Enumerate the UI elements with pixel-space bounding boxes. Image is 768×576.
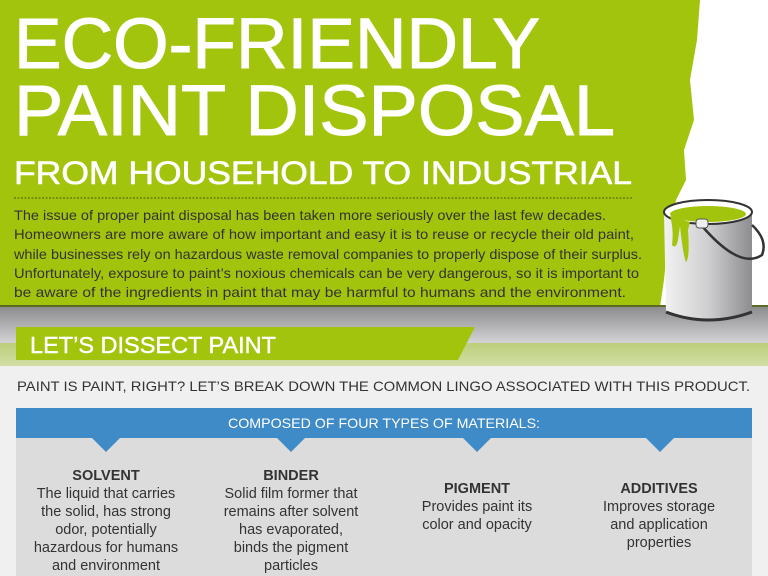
binder: BINDER [263,468,319,484]
pigment [422,481,533,533]
title: ECO-FRIENDLY [14,5,540,84]
pigment: color and opacity [422,517,533,533]
binder [224,468,358,574]
panel: materials [16,408,752,576]
solvent: odor, potentially [55,522,158,538]
solvent: and environment [52,558,160,574]
pigment: PIGMENT [444,481,510,497]
title: FROM HOUSEHOLD TO INDUSTRIAL [14,155,632,191]
icon: paint bucket [664,200,764,320]
intro paragraph: The issue of proper paint disposal has been taken more seriously over the last few decades. [14,207,606,223]
pigment: Provides paint its [422,499,532,515]
intro paragraph: Homeowners are more aware of how important and easy it is to reuse or recycle their old paint, [14,226,634,242]
intro paragraph: be aware of the ingredients in paint that may be harmful to humans and the environment. [14,284,626,300]
intro paragraph: while businesses rely on hazardous waste removal companies to properly dispose of their surplus. [13,246,642,262]
intro paragraph: Unfortunately, exposure to paint’s noxious chemicals can be very dangerous, so it is important to [14,265,639,281]
subheading: PAINT IS PAINT, RIGHT? LET’S BREAK DOWN THE COMMON LINGO ASSOCIATED WITH THIS PRODUCT. [17,378,750,394]
title [14,5,632,191]
solvent: the solid, has strong [41,504,171,520]
additives [603,481,715,551]
binder: has evaporated, [239,522,343,538]
light green band [0,343,768,366]
binder: binds the pigment [234,540,348,556]
section header: let's dissect paint [16,327,475,360]
solvent: SOLVENT [72,468,140,484]
solvent: hazardous for humans [34,540,178,556]
blue bar: COMPOSED OF FOUR TYPES OF MATERIALS: [228,415,540,431]
blue bar [16,408,752,452]
gray band [0,307,768,343]
additives: and application [610,517,708,533]
section header: let's dissect paint: LET’S DISSECT PAINT [30,332,276,358]
solvent [34,468,178,574]
title: PAINT DISPOSAL [14,72,615,151]
binder: particles [264,558,318,574]
additives: ADDITIVES [620,481,698,497]
binder: remains after solvent [224,504,358,520]
additives: properties [627,535,691,551]
binder: Solid film former that [225,486,357,502]
intro paragraph [13,207,642,300]
solvent: The liquid that carries [37,486,175,502]
additives: Improves storage [603,499,715,515]
header background [0,0,768,307]
